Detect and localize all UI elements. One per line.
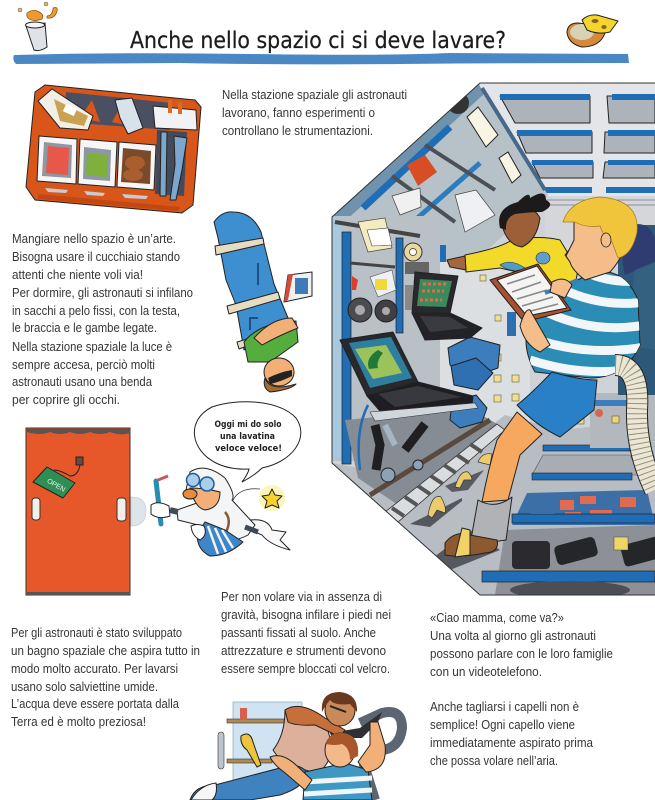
text block: space bathroom: usano solo salviettine umide. xyxy=(11,679,158,694)
text block: eating and sleeping: le braccia e le gambe legate. xyxy=(12,320,157,335)
toothbrush and glove xyxy=(151,476,178,524)
text block: haircut: Anche tagliarsi i capelli non è xyxy=(430,699,579,714)
text block: video phone: con un videotelefono. xyxy=(430,664,542,679)
speech bubble xyxy=(194,402,301,482)
text block: haircut: immediatamente aspirato prima xyxy=(430,735,594,750)
text block: eating and sleeping: Mangiare nello spazio è un’arte. xyxy=(12,231,176,246)
hairdresser astronaut xyxy=(190,692,357,800)
leg xyxy=(482,412,542,502)
floor xyxy=(332,408,655,599)
cutlery xyxy=(155,130,187,200)
text block: haircut: semplice! Ogni capello viene xyxy=(430,717,575,732)
text block: space bathroom: Per gli astronauti è stato sviluppato xyxy=(11,625,182,640)
text block: space bathroom: L’acqua deve essere portata dalla xyxy=(11,696,180,711)
text block: eating and sleeping xyxy=(12,231,193,407)
ceiling panels xyxy=(480,84,655,206)
illustration: astronaut in sleeping bag xyxy=(214,212,312,392)
white cloth xyxy=(250,520,290,550)
text block: space bathroom: modo molto accurato. Per lavarsi xyxy=(11,661,178,676)
left equipment wall xyxy=(332,216,446,464)
video phone laptop lower xyxy=(340,332,478,421)
sock and shoe xyxy=(445,497,512,557)
middle wall with velcro squares xyxy=(440,262,530,437)
text block: station work: lavorano, fanno esperimenti o xyxy=(222,105,375,120)
title brush stroke xyxy=(13,53,629,64)
text block: anchoring feet: Per non volare via in assenza di xyxy=(221,589,382,604)
station outline xyxy=(332,83,655,595)
mascot face xyxy=(183,474,220,510)
text block: anchoring feet: essere sempre bloccati col velcro. xyxy=(221,661,390,676)
open book xyxy=(284,272,312,302)
icon: floating cup and drink xyxy=(18,2,57,51)
floating brush xyxy=(241,734,261,767)
text block: video phone: possono parlare con le loro famiglie xyxy=(430,646,613,661)
vacuum hose xyxy=(615,365,655,490)
blue storage boxes xyxy=(448,337,500,428)
compartment: red food xyxy=(37,136,77,184)
vacuum tube xyxy=(360,712,402,800)
text block: station work: controllano le strumentazioni. xyxy=(222,123,373,138)
door sign: OPEN xyxy=(45,478,66,494)
cameras xyxy=(512,536,655,569)
video phone laptop upper xyxy=(412,272,482,340)
text block: haircut xyxy=(430,699,594,768)
food pouch xyxy=(38,89,93,130)
speech bubble: Oggi mi do solo xyxy=(214,420,282,430)
text block: eating and sleeping: attenti che niente voli via! xyxy=(12,267,143,282)
text block: eating and sleeping: in sacchi a pelo fissi, con la testa, xyxy=(12,303,180,318)
text block: anchoring feet: attrezzature e strumenti devono xyxy=(221,643,386,658)
napkin xyxy=(153,106,197,130)
clipboard xyxy=(490,262,578,352)
silver packet xyxy=(115,98,143,134)
text block: eating and sleeping: Nella stazione spaziale la luce è xyxy=(12,339,172,354)
text block: anchoring feet xyxy=(221,589,391,676)
text block: eating and sleeping: sempre accesa, perciò molti xyxy=(12,357,155,372)
illustration: haircut in space xyxy=(190,692,402,800)
text block: space bathroom: Terra ed è molto preziosa! xyxy=(11,714,146,729)
compartment: green food xyxy=(78,139,117,187)
text block: haircut: che possa volare nell’aria. xyxy=(430,753,558,768)
shorts xyxy=(517,372,597,437)
illustration: mascot with toothbrush xyxy=(151,468,290,556)
compartment: brown food xyxy=(117,142,156,190)
text block: eating and sleeping: Bisogna usare il cucchiaio stando xyxy=(12,249,180,264)
illustration: food tray xyxy=(26,85,201,213)
slanted left ceiling xyxy=(332,83,548,270)
head with eye mask xyxy=(264,358,296,392)
text block: anchoring feet: gravità, bisogna infilare i piedi nei xyxy=(221,607,391,622)
text block: video phone: Una volta al giorno gli astronauti xyxy=(430,628,596,643)
text block: eating and sleeping: per coprire gli occhi. xyxy=(12,392,120,407)
laptop mount arms xyxy=(359,405,425,482)
door sign xyxy=(33,467,75,498)
speech bubble: una lavatina xyxy=(220,432,275,442)
illustration: bathroom door xyxy=(26,428,146,595)
text block: station work: Nella stazione spaziale gli astronauti xyxy=(222,87,407,102)
text block: eating and sleeping: Per dormire, gli astronauti si infilano xyxy=(12,285,193,300)
text block: space bathroom: un bagno spaziale che aspira tutto in xyxy=(11,643,200,658)
text block: video phone: «Ciao mamma, come va?» xyxy=(430,610,564,625)
back wall right xyxy=(577,224,655,448)
text block: station work xyxy=(222,87,407,138)
icon: cheese and bread xyxy=(567,15,618,47)
text block: anchoring feet: passanti fissati al suolo. Anche xyxy=(221,625,376,640)
boy head and hair xyxy=(563,197,637,280)
text block: eating and sleeping: astronauti usano una benda xyxy=(12,374,153,389)
boy astronaut xyxy=(445,197,645,557)
striped towel xyxy=(191,522,243,556)
text block: video phone xyxy=(430,610,613,679)
speech bubble: veloce veloce! xyxy=(215,444,282,454)
girl astronaut xyxy=(447,193,578,290)
title: Anche nello spazio ci si deve lavare? xyxy=(130,28,506,54)
illustration: space station interior xyxy=(332,83,655,599)
striped sweater xyxy=(525,272,645,378)
astronaut getting a haircut xyxy=(270,722,385,800)
text block: space bathroom xyxy=(11,625,200,729)
